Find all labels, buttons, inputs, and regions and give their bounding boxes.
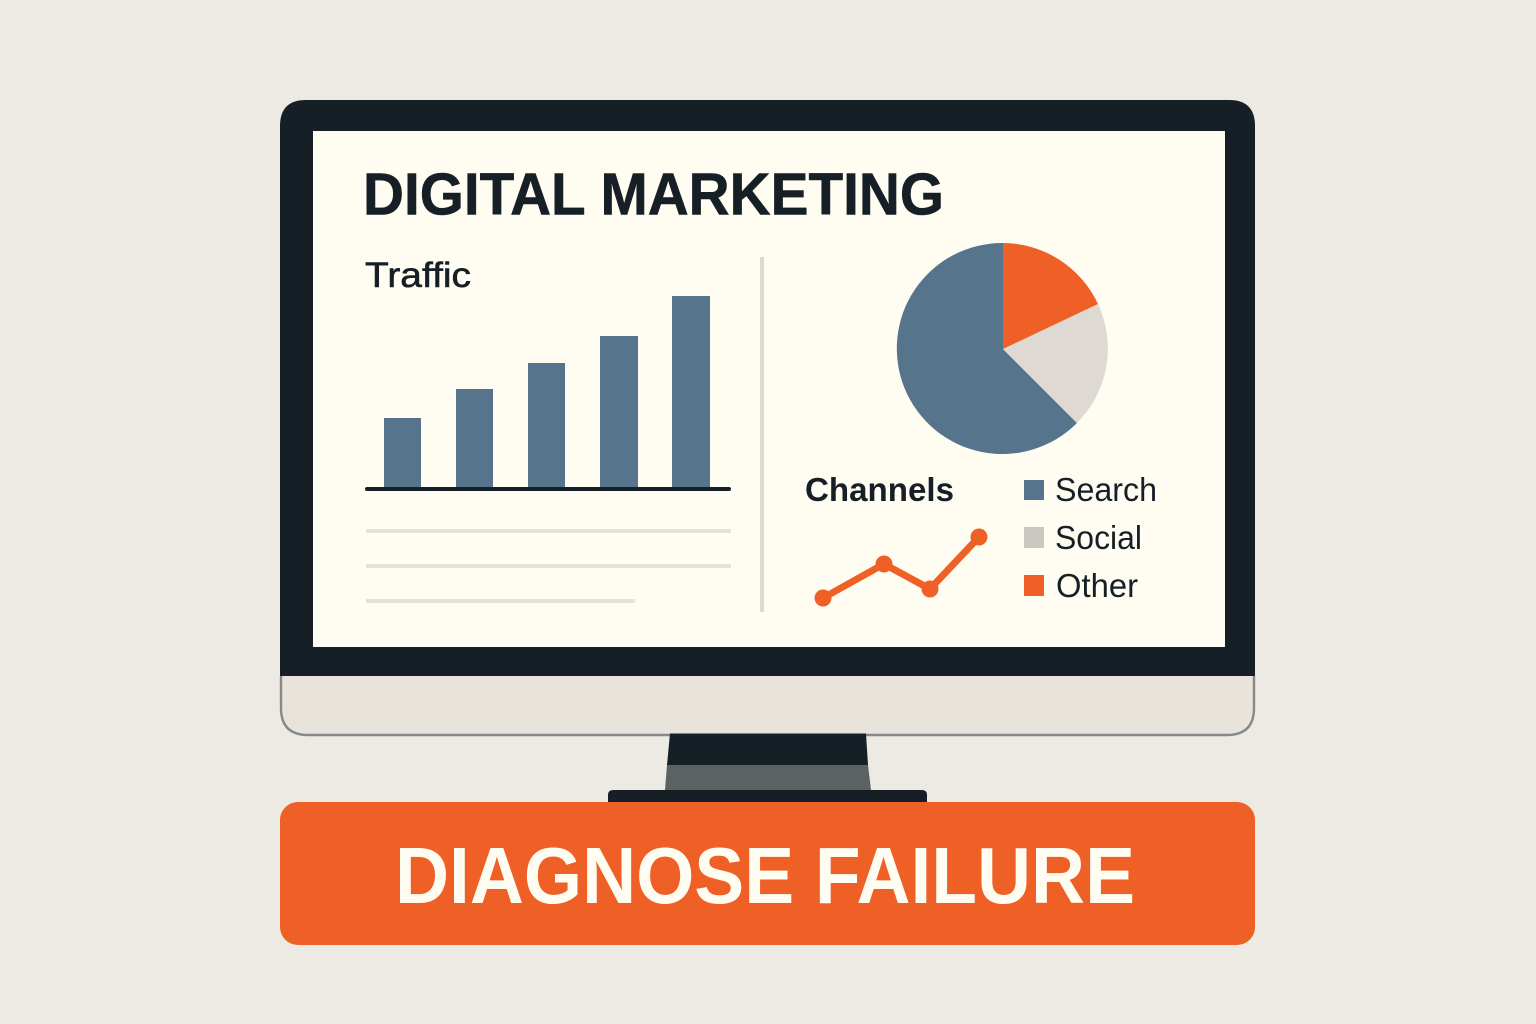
monitor <box>280 100 1255 735</box>
text placeholder lines <box>366 529 731 603</box>
screen <box>313 131 1225 647</box>
banner <box>280 802 1255 945</box>
heading: traffic: Traffic <box>365 255 471 295</box>
monitor bezel <box>280 100 1255 676</box>
pie chart: channels <box>897 243 1108 454</box>
legend: Social <box>1055 519 1142 556</box>
legend: Other <box>1056 567 1138 604</box>
banner text: DIAGNOSE FAILURE <box>395 831 1135 920</box>
bar chart: traffic <box>365 296 731 491</box>
title: DIGITAL MARKETING <box>363 160 944 228</box>
legend: Search <box>1055 471 1157 508</box>
monitor chin <box>281 676 1254 735</box>
line chart <box>814 528 988 606</box>
heading: channels: Channels <box>805 471 954 508</box>
monitor stand <box>608 734 927 802</box>
legend <box>1024 471 1157 604</box>
